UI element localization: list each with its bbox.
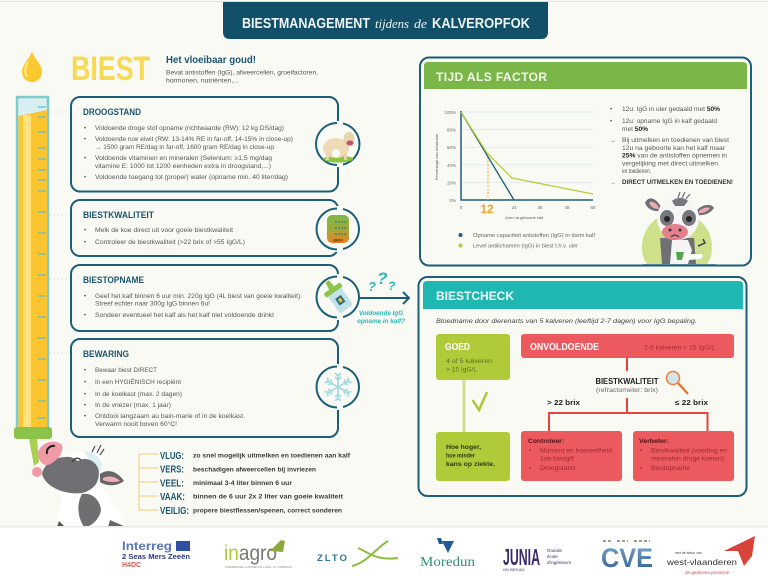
- list: biestkwaliteit: Controleer de biestkwaliteit (>22 brix of >55 IgG/L): [95, 240, 245, 246]
- list: biestopname: •: [84, 294, 86, 300]
- VEILIG: [160, 506, 342, 517]
- logo: junia: école: [547, 554, 558, 559]
- logo: interreg: [122, 539, 190, 569]
- callout: voldoende IgG: Voldoende IgG: [359, 310, 403, 317]
- box: goed: [436, 334, 510, 380]
- heading: bewaring: BEWARING: [83, 349, 129, 359]
- box: controleer: 1ste biestgift: [540, 456, 574, 462]
- list: bewaring: •: [84, 380, 86, 386]
- line chart: 48: [564, 205, 570, 210]
- logo: west-vlaanderen: west-vlaanderen: [666, 557, 737, 567]
- box: onvoldoende: ONVOLDOENDE: [530, 342, 599, 353]
- logo: cve: CVE: [601, 543, 653, 573]
- intro: biestcheck: Bloedname door dierenarts van 5 kalveren (leeftijd 2-7 dagen) voor IgG bepaling.: [436, 318, 697, 325]
- list: biestkwaliteit: Melk de koe direct uit voor goeie biestkwaliteit: [95, 228, 233, 234]
- key findings text: 12u: IgG in uier gedaald met 50%: [622, 107, 721, 113]
- list: bewaring: In de koelkast (max. 2 dagen): [95, 392, 182, 398]
- heading: biestopname: BIESTOPNAME: [83, 275, 144, 285]
- line chart: 0: [460, 205, 463, 210]
- decision connectors: [549, 358, 708, 431]
- line chart: 0%: [449, 198, 456, 203]
- logo: west-vlaanderen: de gedreven provincie: [685, 570, 730, 575]
- list: droogstand: → 1500 gram RE/dag in far-off, 1600 gram RE/dag in close-up: [95, 145, 275, 151]
- list: bewaring: •: [84, 392, 86, 398]
- arrow: biestopname to biestcheck: [357, 269, 409, 325]
- logo: junia: Grande: [547, 548, 563, 553]
- intro text: Bevat antistoffen (IgG), afweercellen, groeifactoren,: [166, 70, 318, 76]
- list: bewaring: •: [84, 414, 86, 420]
- VAAK: [160, 492, 343, 503]
- chart legend: [458, 233, 595, 250]
- logo: junia: d'ingénieurs: [547, 560, 572, 565]
- logo: zlto: ZLTO: [317, 553, 349, 564]
- title banner: de: [414, 17, 427, 31]
- box: onvoldoende: 2-5 kalveren < 15 IgG/L: [644, 344, 716, 352]
- heading: droogstand: DROOGSTAND: [83, 107, 141, 117]
- icon: dry cow: [316, 123, 359, 165]
- intro text: hormonen, nutriënten,...: [166, 78, 239, 84]
- box: controleer: Moment en hoeveelheid: [540, 448, 612, 454]
- box: hoe hoger: [436, 432, 510, 481]
- question marks: [368, 269, 396, 294]
- list: bewaring: Ontdooi langzaam au bain-marie of in de koelkast.: [95, 414, 245, 420]
- VEEL: minimaal 3-4 liter binnen 6 uur: [193, 481, 293, 487]
- logo: junia: JUNIA: [503, 544, 540, 570]
- label: biestkwaliteit: [596, 377, 659, 394]
- box: verbeter: [633, 431, 734, 481]
- icon: snowflake: [317, 366, 359, 408]
- panel: biestopname: [71, 265, 361, 331]
- list: biestopname: [84, 294, 302, 319]
- line chart: 24: [511, 205, 517, 210]
- list: droogstand: •: [84, 126, 86, 132]
- title banner: tijdens: [375, 17, 409, 31]
- heading: BIEST: BIEST: [71, 50, 150, 88]
- line chart: 80%: [447, 128, 456, 132]
- intro text: Het vloeibaar goud!: [166, 55, 256, 66]
- icon: feeding bottle gauge: [14, 97, 52, 466]
- intro text: [166, 55, 318, 84]
- box: controleer: Droogstand: [540, 466, 575, 472]
- key findings text: 12u na geboorte kan het kalf maar: [622, 146, 725, 152]
- key findings text: Bij uitmelken en toedienen van biest: [622, 138, 729, 144]
- key findings text: vergelijking met direct uitmelken: [622, 162, 718, 168]
- key findings text: met 50%: [622, 127, 649, 133]
- box: controleer: •: [529, 448, 531, 454]
- logo: zlto: [317, 541, 398, 566]
- list: droogstand: Voldoende droge stof opname (richtwaarde (RW): 12 kg DS/dag): [95, 126, 284, 132]
- label: biestkwaliteit: (refractometer: brix): [596, 388, 658, 394]
- heading: biestcheck: BIESTCHECK: [436, 289, 514, 303]
- logo: moredun: [420, 538, 475, 570]
- list: droogstand: vitamine E: 1000 tot 1200 eenheden extra in droogstand,...): [95, 164, 271, 170]
- VAAK: VAAK:: [160, 492, 185, 503]
- VEEL: [160, 478, 293, 490]
- VEEL: VEEL:: [160, 478, 184, 490]
- logo: inagro: inagro: [224, 542, 277, 565]
- list: droogstand: Voldoende toegang tot (proper) water (opname min. 40 liter/dag): [95, 175, 288, 181]
- VEILIG: VEILIG:: [160, 506, 189, 517]
- list: droogstand: •: [84, 156, 86, 162]
- logo: interreg: 2 Seas Mers Zeeën: [122, 552, 190, 561]
- line chart: [434, 110, 596, 220]
- list: droogstand: [84, 126, 293, 181]
- list: bewaring: In een HYGIËNISCH recipiënt: [95, 379, 181, 386]
- line chart: 40%: [447, 163, 456, 168]
- heading: tijd als factor: TIJD ALS FACTOR: [436, 70, 547, 84]
- VLUG: zo snel mogelijk uitmelken en toedienen aan kalf: [193, 454, 351, 460]
- line chart: Uren na geboorte kalf: [505, 215, 544, 220]
- list: bewaring: In de vriezer (max. 1 jaar): [95, 403, 171, 409]
- key findings text: 25% van de antistoffen opnemen in: [622, 154, 727, 160]
- line chart: Percentage van maximum: [434, 133, 439, 180]
- line chart: 20%: [447, 180, 456, 186]
- list: droogstand: Voldoende ruw eiwit (RW: 13-14% RE in far-off, 14-15% in close-up): [95, 137, 293, 143]
- list: vijf V's: [139, 451, 351, 517]
- box: goed: 4 of 5 kalveren: [446, 359, 492, 365]
- list: biestkwaliteit: •: [84, 228, 86, 234]
- box: verbeter: •: [640, 448, 642, 454]
- callout: voldoende IgG: [357, 310, 405, 325]
- panel: droogstand: [71, 97, 361, 192]
- VERS: VERS:: [160, 464, 184, 476]
- box: onvoldoende: [521, 334, 734, 358]
- list: bewaring: Verwarm nooit boven 60°C!: [95, 422, 177, 428]
- logo: west-vlaanderen: met de steun van: [675, 551, 702, 555]
- key findings text: [610, 107, 733, 186]
- logo: interreg: H4DC: [122, 562, 141, 569]
- icon: brix meter: [317, 208, 359, 250]
- box: goed: GOED: [445, 342, 470, 353]
- VLUG: [160, 451, 351, 462]
- box: controleer: [521, 431, 622, 481]
- VEILIG: propere biestflessen/spenen, correct sonderen: [193, 508, 342, 514]
- label: biestkwaliteit: BIESTKWALITEIT: [596, 377, 659, 386]
- icon: magnifier: [666, 372, 688, 394]
- line chart: 36: [537, 205, 543, 210]
- VERS: [160, 464, 316, 476]
- footer: partner logos: [0, 526, 768, 576]
- box: hoe hoger: kans op ziekte.: [446, 462, 495, 468]
- key findings text: DIRECT UITMELKEN EN TOEDIENEN!: [622, 180, 733, 186]
- list: biestkwaliteit: [84, 228, 245, 246]
- box: verbeter: Biestkwaliteit (voeding en: [651, 448, 727, 454]
- key findings text: •: [610, 119, 612, 125]
- line chart: 12: [480, 202, 494, 216]
- label: groter dan 22 brix: > 22 brix: [547, 400, 580, 407]
- list: droogstand: •: [84, 137, 86, 143]
- icon: milk bottle: [317, 276, 359, 318]
- logo: west-vlaanderen: [666, 536, 755, 575]
- label: kleiner dan 22 brix: ≤ 22 brix: [675, 400, 708, 407]
- chart legend: Level antilichamen (IgG) in biest t.h.v. uier: [473, 244, 578, 250]
- key findings text: →: [610, 138, 616, 144]
- line chart: 60: [590, 205, 596, 210]
- key findings text: en toedienen.: [622, 169, 651, 175]
- title banner: KALVEROPFOK: [432, 16, 530, 32]
- list: bewaring: Bewaar biest DIRECT: [95, 368, 157, 374]
- box: hoe hoger: hoe minder: [446, 454, 476, 460]
- question marks: ?: [388, 279, 396, 293]
- question marks: ?: [368, 279, 376, 294]
- box: verbeter: •: [640, 466, 642, 472]
- logo: moredun: Moredun: [420, 555, 475, 570]
- VAAK: binnen de 6 uur 2x 2 liter van goeie kwaliteit: [193, 494, 343, 500]
- panel: biestkwaliteit: [71, 200, 361, 256]
- box: verbeter: Verbeter:: [639, 439, 669, 445]
- box: verbeter: Biestopname: [651, 466, 691, 472]
- list: bewaring: •: [84, 403, 86, 409]
- logo: junia: HEI ISEN ISA: [503, 568, 525, 572]
- list: droogstand: Voldoende vitaminen en mineralen (Selenium: ≥1,5 mg/dag: [95, 156, 272, 162]
- box: goed: > 15 IgG/L: [446, 368, 478, 374]
- box: controleer: •: [529, 466, 531, 472]
- icon: brix meter: BRIX: [333, 238, 343, 242]
- list: bewaring: •: [84, 368, 86, 374]
- heading: biestkwaliteit: BIESTKWALITEIT: [83, 210, 154, 220]
- title banner: BIESTMANAGEMENT: [242, 16, 370, 32]
- box: verbeter: mineralen droge koeien): [651, 456, 724, 462]
- heading: tijd als factor: [424, 62, 747, 89]
- list: biestkwaliteit: •: [84, 240, 86, 246]
- VLUG: VLUG:: [160, 451, 184, 462]
- panel: biestcheck: [418, 277, 746, 496]
- line chart: 60%: [447, 145, 456, 150]
- list: biestopname: Geef het kalf binnen 6 uur min. 220g IgG (4L biest van goeie kwaliteit).: [95, 294, 302, 300]
- callout: voldoende IgG: opname in kalf?: [357, 318, 405, 325]
- panel: tijd als factor: [420, 58, 751, 266]
- key findings text: 12u: opname IgG in kalf gedaald: [622, 119, 717, 125]
- list: bewaring: [84, 368, 245, 428]
- heading: biestcheck: [423, 281, 743, 309]
- logo: inagro: ONDERZOEK & ADVIES IN LAND- & TUINBOUW: [225, 565, 292, 569]
- box: controleer: Controleer:: [528, 439, 564, 445]
- icon: check mark: [472, 392, 487, 410]
- list: biestopname: Streef echter naar 300g IgG binnen 6u!: [95, 302, 210, 308]
- chart legend: Opname capaciteit antistoffen (IgG) in darm kalf: [473, 233, 595, 239]
- line chart: 100%: [444, 110, 456, 115]
- illustration: worried calf: [642, 192, 716, 265]
- key findings text: →: [610, 180, 616, 186]
- list: droogstand: •: [84, 175, 86, 181]
- logo: interreg: Interreg: [122, 539, 172, 553]
- question marks: ?: [377, 269, 388, 288]
- list: biestopname: •: [84, 313, 86, 319]
- illustration: drinking calf: [32, 442, 126, 527]
- title banner: [223, 2, 548, 39]
- panel: bewaring: [71, 339, 361, 437]
- logo: inagro: [224, 540, 292, 569]
- list: biestopname: Sondeer eventueel het kalf als het kalf niet voldoende drinkt: [95, 313, 274, 319]
- VERS: beschadigen afweercellen bij invriezen: [193, 468, 316, 474]
- icon: colostrum drop: [22, 51, 42, 82]
- box: hoe hoger: Hoe hoger,: [446, 445, 481, 451]
- key findings text: •: [610, 107, 612, 113]
